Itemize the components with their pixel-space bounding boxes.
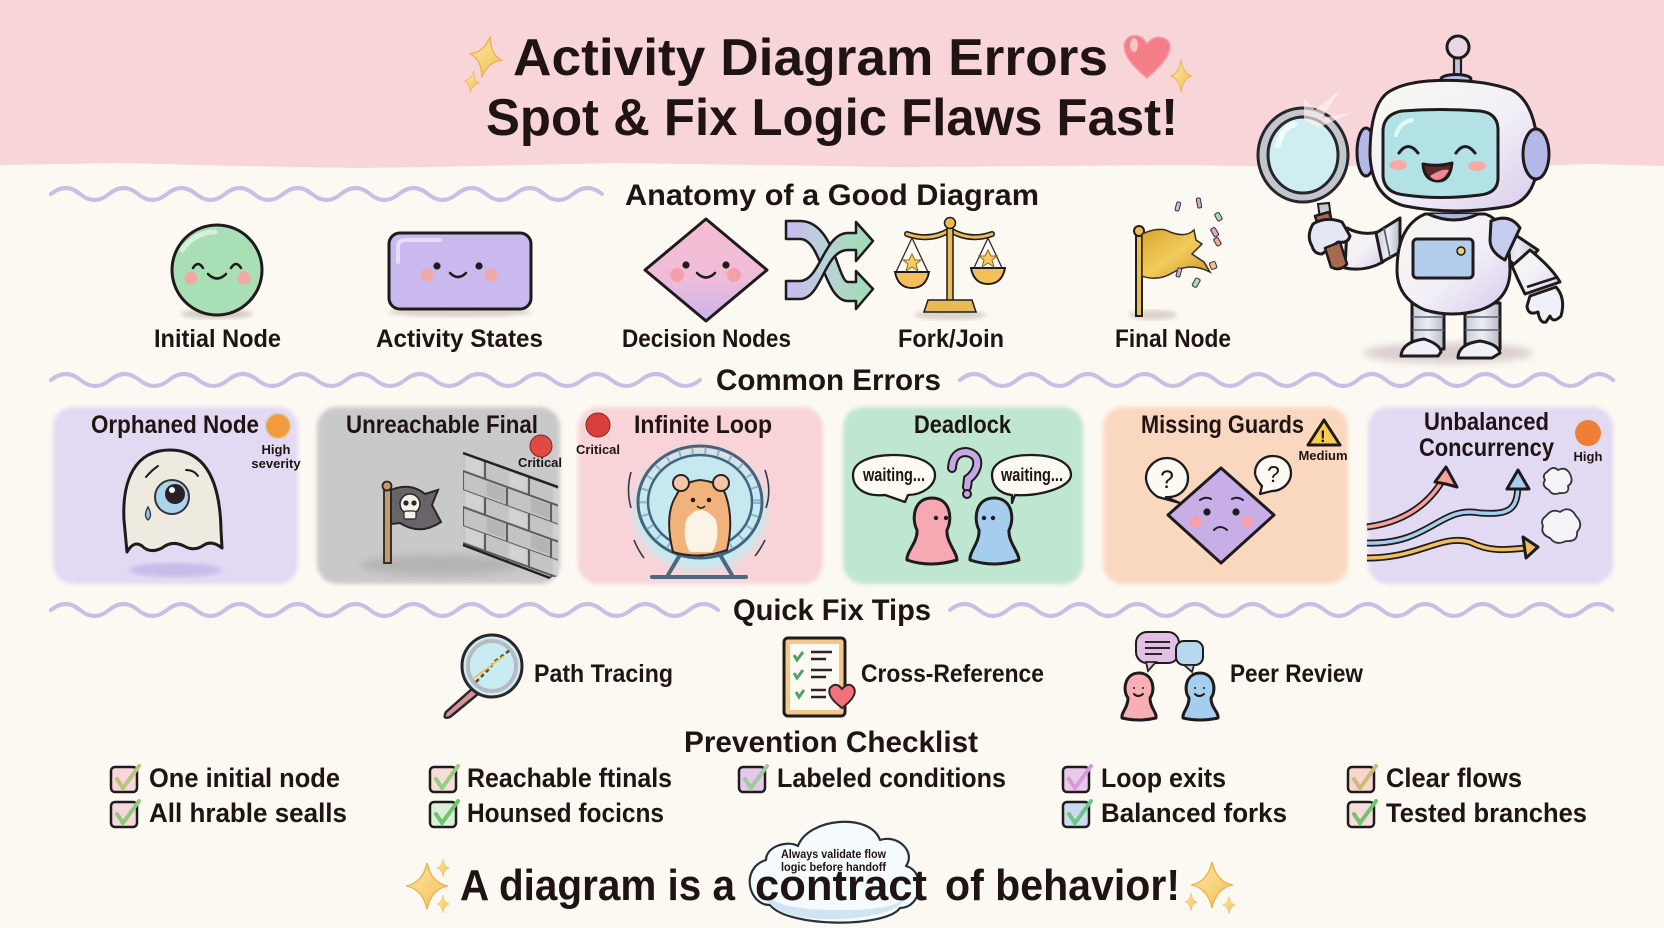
panel: deadlock xyxy=(843,407,1083,584)
magnifier held by robot xyxy=(1258,90,1353,269)
panel: missing guards: Missing Guards xyxy=(1141,411,1304,439)
panel: missing guards: Medium xyxy=(1298,448,1348,463)
icon: title sparkles and heart xyxy=(463,33,1192,94)
heading: quick fix tips: Quick Fix Tips xyxy=(733,594,931,627)
icon: fork join arrows xyxy=(786,221,873,309)
panel: deadlock: waiting... xyxy=(862,465,925,485)
item: initial node: Initial Node xyxy=(154,325,281,353)
panel: anatomy section xyxy=(51,179,1231,353)
title line one: Activity Diagram Errors xyxy=(513,29,1108,87)
robot mascot with magnifier xyxy=(1258,36,1563,363)
checklist item: tested branches: Tested branches xyxy=(1386,798,1587,828)
panel: orphaned node: severity xyxy=(251,456,301,471)
panel: orphaned node xyxy=(53,407,301,584)
panel: missing guards xyxy=(1103,407,1348,584)
item: decision nodes xyxy=(622,219,791,353)
robot left arm xyxy=(1345,218,1400,269)
wave divider xyxy=(51,374,700,386)
heading: anatomy: Anatomy of a Good Diagram xyxy=(625,179,1039,212)
tagline emphasis word: contract xyxy=(755,861,927,910)
tip: peer review xyxy=(1122,632,1363,720)
checklist item: balanced forks: Balanced forks xyxy=(1101,798,1287,828)
tip: path tracing xyxy=(445,635,673,718)
panel: unbalanced concurrency: Unbalanced xyxy=(1424,408,1549,436)
checklist item: all hrable sealls: All hrable sealls xyxy=(149,798,347,828)
checklist item: labeled conditions: Labeled conditions xyxy=(777,763,1006,793)
item: activity states xyxy=(376,233,543,353)
heading: common errors: Common Errors xyxy=(716,364,941,397)
panel: missing guards: ? xyxy=(1160,466,1174,494)
wave divider xyxy=(51,188,602,200)
icon: thought cloud: logic before handoff xyxy=(781,862,886,874)
title line two: Spot & Fix Logic Flaws Fast! xyxy=(486,89,1178,147)
panel: orphaned node: High xyxy=(262,442,290,457)
robot legs and feet xyxy=(1401,303,1500,358)
item: fork join scale: Fork/Join xyxy=(898,325,1004,353)
icon: thought cloud xyxy=(750,822,919,923)
robot screen face xyxy=(1383,110,1498,198)
panel: deadlock: Deadlock xyxy=(914,411,1011,439)
checklist item: loop exits: Loop exits xyxy=(1101,763,1226,793)
tip: cross reference xyxy=(784,638,1044,716)
item: final node flag xyxy=(1115,198,1231,353)
checklist item: one initial node: One initial node xyxy=(149,763,340,793)
robot head xyxy=(1370,80,1538,211)
panel: unreachable final: Critical xyxy=(518,455,562,470)
panel: missing guards: ? xyxy=(1267,461,1280,487)
tip: path tracing: Path Tracing xyxy=(534,660,673,688)
panel: unbalanced concurrency: High xyxy=(1574,449,1602,464)
wave divider right xyxy=(960,374,1613,386)
checklist item: reachable finals: Reachable ftinals xyxy=(467,763,672,793)
item: initial node xyxy=(154,225,281,353)
panel: unreachable final: Unreachable Final xyxy=(346,411,538,439)
wave divider xyxy=(51,604,718,616)
tagline text: A diagram is a xyxy=(460,861,735,910)
header band xyxy=(0,0,1664,168)
icon: thought cloud: Always validate flow xyxy=(781,849,886,861)
heading: prevention checklist: Prevention Checklist xyxy=(684,726,978,759)
robot right ear cap xyxy=(1523,129,1549,179)
item: fork join scale xyxy=(895,218,1005,353)
panel: prevention checklist xyxy=(111,726,1587,828)
title xyxy=(463,29,1192,147)
tip: peer review: Peer Review xyxy=(1230,660,1363,688)
robot right arm xyxy=(1498,232,1563,322)
panel: unreachable final xyxy=(317,407,562,584)
checklist item: clear flows: Clear flows xyxy=(1386,763,1522,793)
item: decision nodes: Decision Nodes xyxy=(622,325,791,353)
footer tagline xyxy=(406,822,1235,923)
item: final node flag: Final Node xyxy=(1115,325,1231,353)
item: activity states: Activity States xyxy=(376,325,543,353)
panel: unbalanced concurrency: Concurrency xyxy=(1419,434,1554,462)
tagline ending: of behavior! xyxy=(945,861,1180,910)
panel: infinite loop: Critical xyxy=(576,442,620,457)
tip: cross reference: Cross-Reference xyxy=(861,660,1044,688)
panel: common errors section xyxy=(51,364,1613,584)
panel: missing guards: ! xyxy=(1320,427,1326,446)
checklist item: hounsed focicns: Hounsed focicns xyxy=(467,798,664,828)
panel: orphaned node: Orphaned Node xyxy=(91,411,259,439)
panel: infinite loop xyxy=(576,407,823,584)
icon: footer sparkles xyxy=(406,859,1235,914)
panel: quick fix tips xyxy=(51,594,1612,720)
panel: unbalanced concurrency xyxy=(1367,407,1613,584)
robot ears xyxy=(1357,127,1548,181)
robot body xyxy=(1397,214,1520,314)
panel: infinite loop: Infinite Loop xyxy=(634,411,772,439)
robot antenna xyxy=(1441,36,1471,84)
wave divider right xyxy=(950,604,1612,616)
panel: deadlock: waiting... xyxy=(1000,465,1063,485)
robot shadow xyxy=(1363,343,1533,363)
